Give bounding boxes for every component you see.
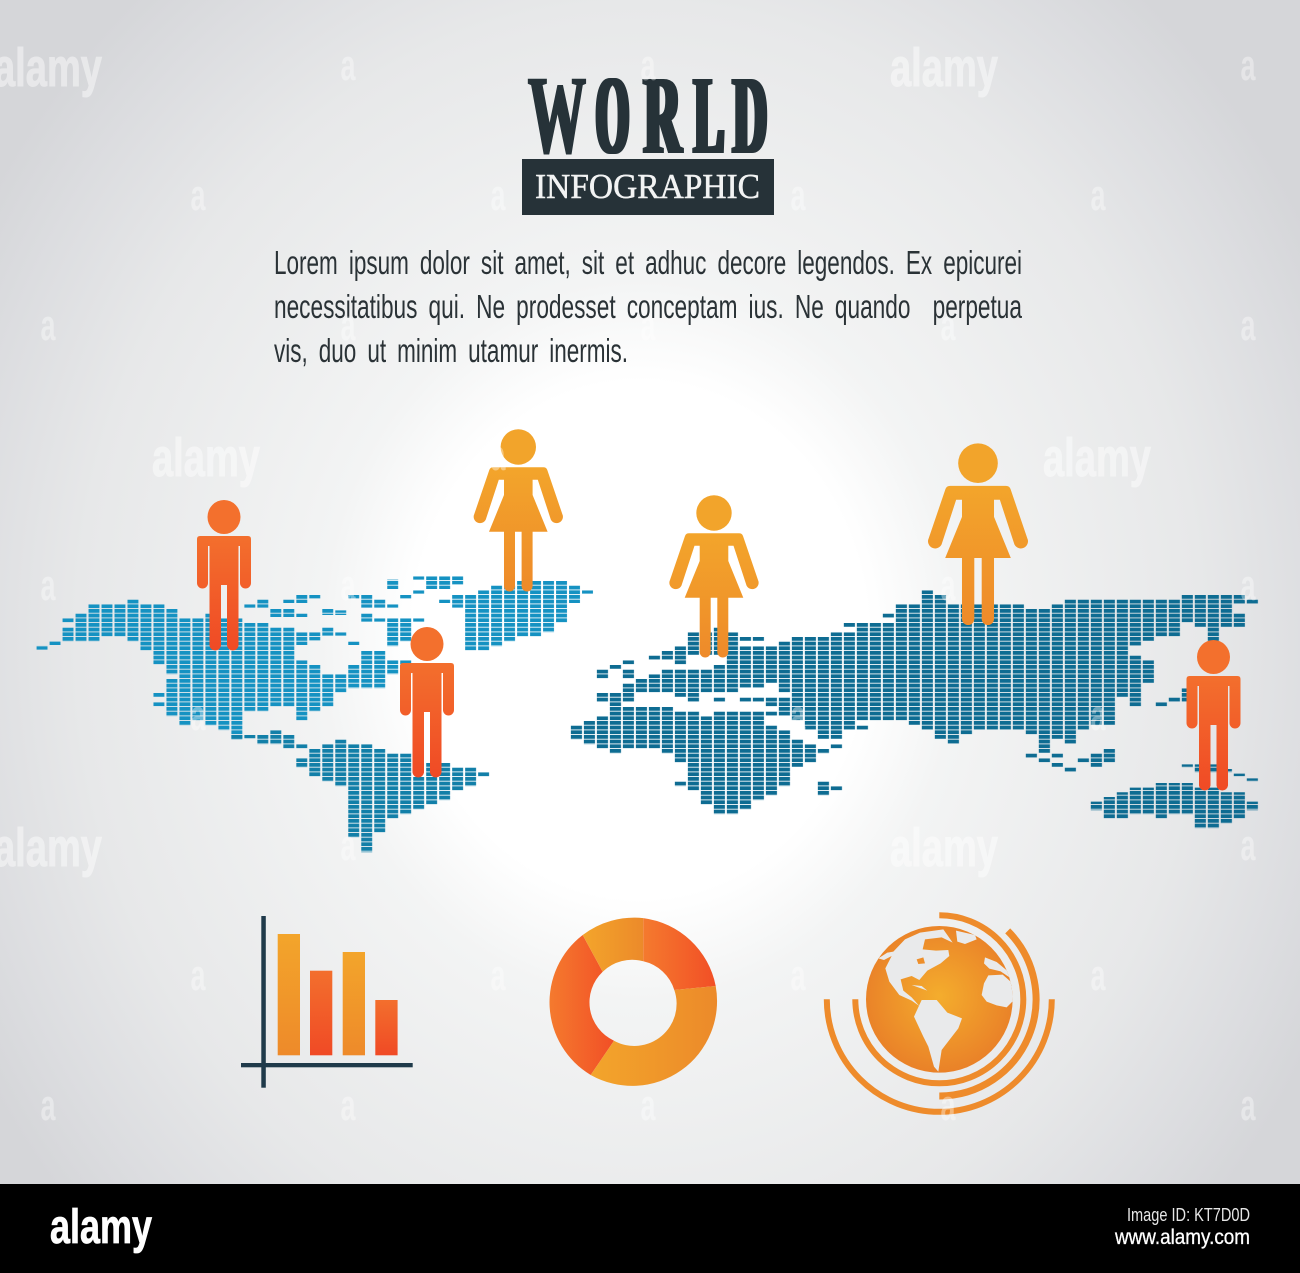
text: D [733,54,767,178]
person: man, australia [1186,640,1240,791]
watermarks: alamy [890,818,998,878]
watermarks: a [40,301,56,350]
watermarks: alamy [152,428,260,488]
globe icon with orbit rings [827,915,1052,1112]
watermarks: a [340,301,356,350]
watermarks: a [640,301,656,350]
watermarks: a [640,1081,656,1130]
map: south america [231,730,490,852]
footer bar [0,1184,1300,1273]
watermarks: a [340,1081,356,1130]
watermarks: a [1090,691,1106,740]
dotted world map [36,576,1258,852]
watermarks: a [340,41,356,90]
title: WORLD [528,54,767,178]
person: woman, asia [928,443,1028,625]
title banner: INFOGRAPHIC [522,159,774,215]
intro paragraph: vis, duo ut minim utamur inermis. [274,332,628,369]
watermarks: a [490,691,506,740]
watermarks: a [940,301,956,350]
title: WORLD: O [596,54,629,178]
footer logo: alamy [50,1201,152,1254]
watermarks: a [490,171,506,220]
watermarks: alamy [890,38,998,98]
watermarks: a [940,1081,956,1130]
watermarks: a [40,561,56,610]
title banner: INFOGRAPHIC: INFOGRAPHIC [535,167,760,206]
person: woman, europe [669,495,759,658]
watermarks: a [490,431,506,480]
orbit rings [827,915,1052,1112]
bar chart [241,916,413,1088]
watermarks: a [790,431,806,480]
footer url: www.alamy.com [1114,1226,1250,1249]
watermarks: a [340,821,356,870]
watermarks: a [1240,1081,1256,1130]
globe with continents [866,926,1014,1073]
intro paragraph [274,244,1022,369]
person: man, north america [197,500,251,651]
watermarks: a [790,691,806,740]
donut chart [550,918,717,1086]
watermarks: a [640,41,656,90]
watermarks: alamy [1043,428,1151,488]
watermarks: a [940,561,956,610]
watermarks: a [1090,171,1106,220]
watermarks: a [190,691,206,740]
watermarks: a [640,561,656,610]
watermarks: a [640,821,656,870]
person: man, south america [400,627,454,778]
watermarks: a [790,951,806,1000]
watermarks: a [1240,301,1256,350]
watermarks: a [490,951,506,1000]
map: europe, africa, asia, australia [570,590,1258,828]
title: WORLD: L [694,54,724,178]
footer image id: Image ID: KT7D0D [1127,1205,1250,1225]
person: woman, greenland [474,429,563,592]
watermarks: a [340,561,356,610]
title: WORLD: W [528,54,586,178]
watermarks: a [40,1081,56,1130]
watermarks: a [1240,41,1256,90]
watermarks: a [1240,821,1256,870]
title: WORLD: R [644,54,682,178]
watermarks: a [1090,951,1106,1000]
watermarks: a [190,951,206,1000]
watermarks: a [1240,561,1256,610]
map: north america and greenland [36,576,594,740]
watermarks: a [190,171,206,220]
watermarks: a [790,171,806,220]
